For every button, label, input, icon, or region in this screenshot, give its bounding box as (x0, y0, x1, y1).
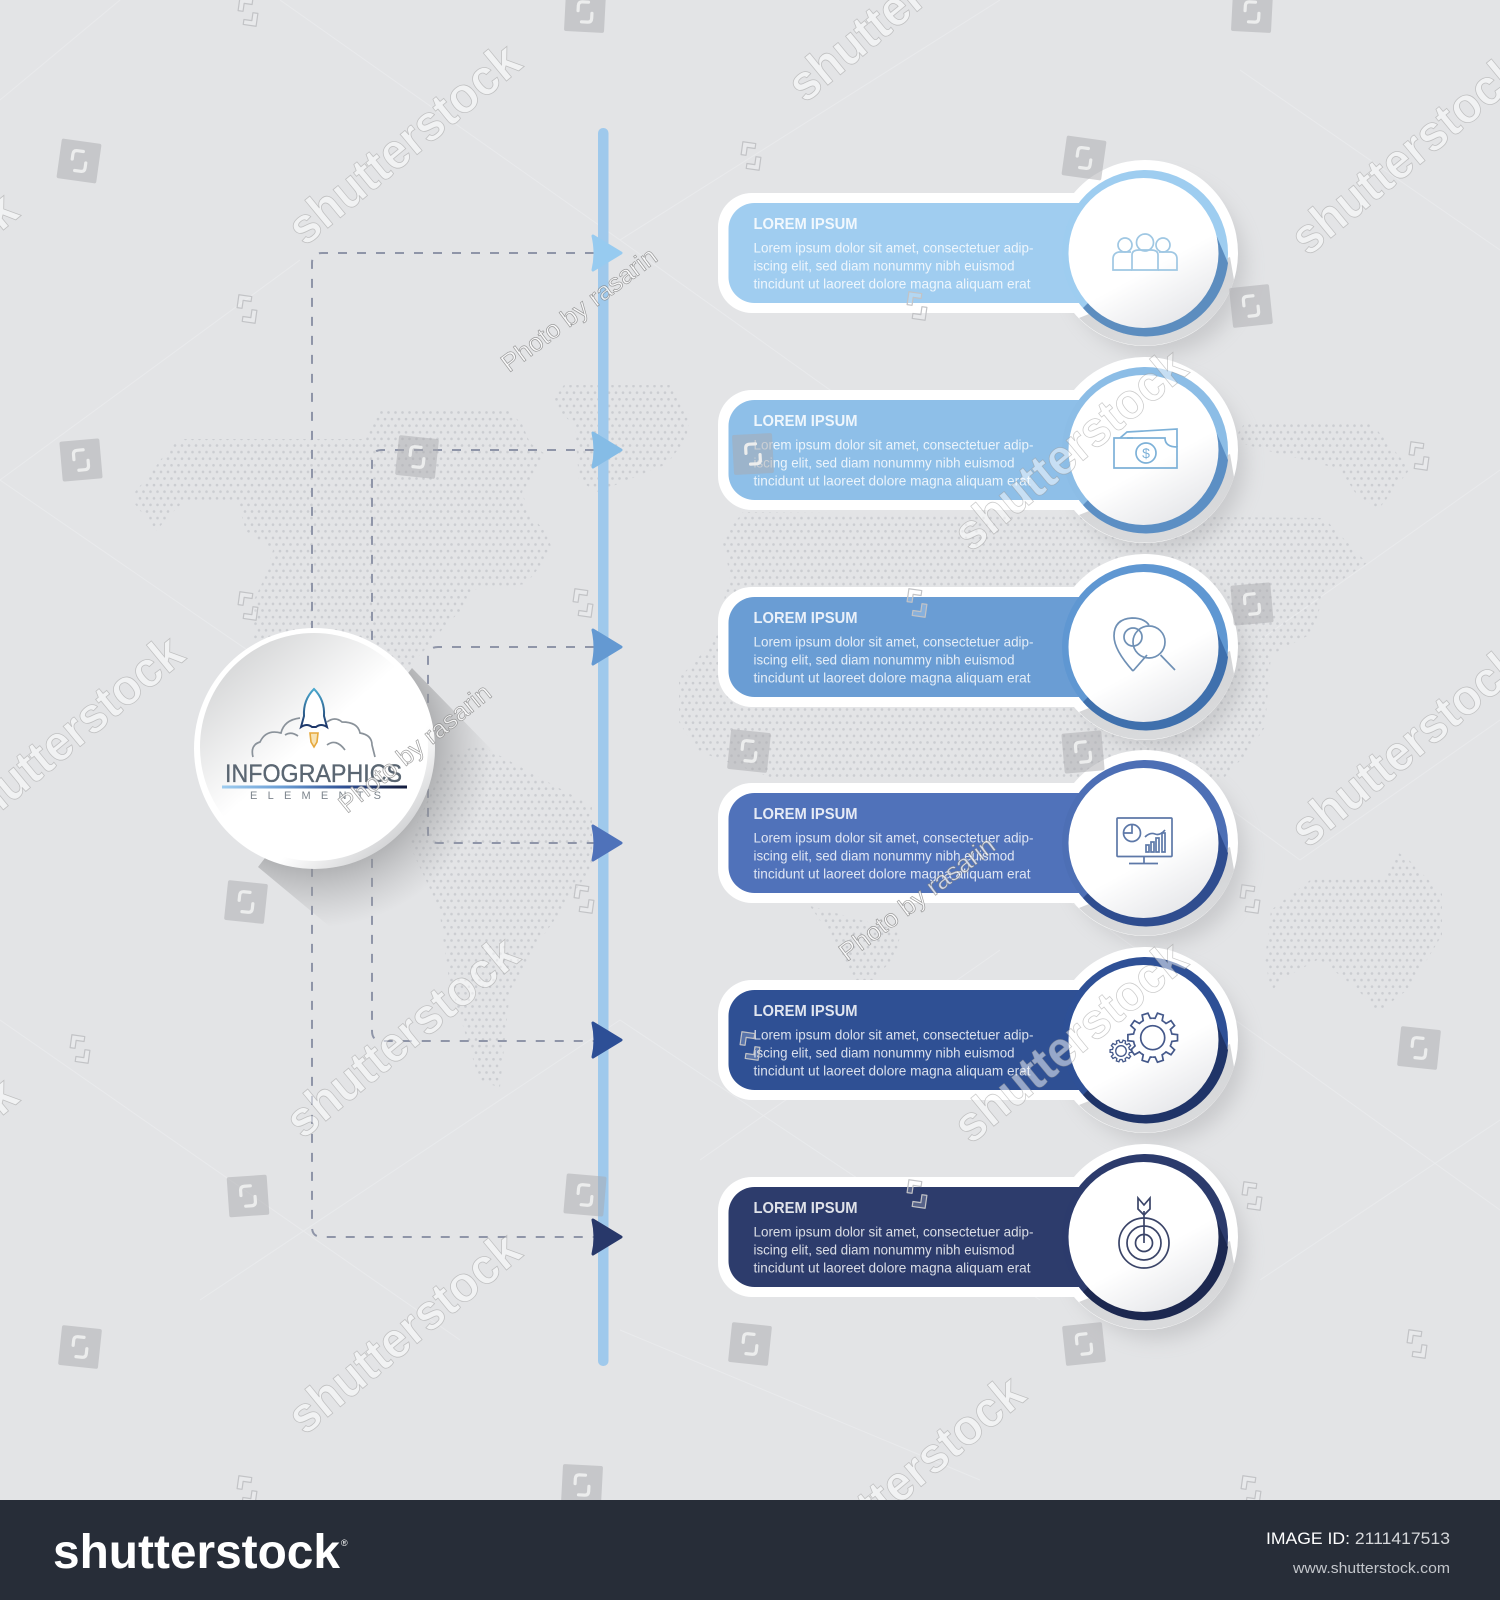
body text: iscing elit, sed diam nonummy nibh euismod (754, 1044, 1014, 1060)
watermark: photo credit: Photo by rasarin (496, 242, 663, 378)
world map: left dotted (135, 385, 690, 1087)
panel: step 5 (718, 947, 1245, 1142)
heading: LOREM IPSUM (754, 413, 858, 430)
body text: tincidunt ut laoreet dolore magna aliquam erat (754, 472, 1031, 488)
watermark: photo credit: Photo by rasarin (333, 679, 497, 819)
heading: LOREM IPSUM (754, 610, 858, 627)
panel: step 2 (718, 357, 1245, 552)
dashed connectors (312, 253, 594, 1237)
footer image id: IMAGE ID: 2111417513 (1266, 1529, 1450, 1548)
footer bar (0, 1500, 1500, 1600)
icon: gears (1110, 1012, 1178, 1063)
icon: banknotes (1114, 429, 1177, 468)
heading: LOREM IPSUM (754, 806, 858, 823)
body text: Lorem ipsum dolor sit amet, consectetuer adip- (754, 239, 1034, 255)
heading: LOREM IPSUM (754, 216, 858, 233)
body text (754, 1026, 1034, 1078)
body text: Lorem ipsum dolor sit amet, consectetuer adip- (754, 633, 1034, 649)
body text: iscing elit, sed diam nonummy nibh euismod (754, 1241, 1014, 1257)
icon: banknotes: $ (1142, 445, 1150, 461)
body text: tincidunt ut laoreet dolore magna aliquam erat (754, 865, 1031, 881)
logo title: INFOGRAPHICS (225, 760, 402, 788)
heading: LOREM IPSUM (754, 1003, 858, 1020)
body text: Lorem ipsum dolor sit amet, consectetuer adip- (754, 829, 1034, 845)
body text: Lorem ipsum dolor sit amet, consectetuer adip- (754, 1026, 1034, 1042)
icon: location pin and magnifier (1114, 618, 1175, 671)
logo subtitle: ELEMENTS (250, 790, 381, 802)
watermark: diagonal brand text: shutterstock (780, 1364, 1035, 1587)
arrow 2 (593, 433, 621, 467)
panel: step 3 (718, 554, 1245, 749)
watermark: diagonal brand text: shutterstock (942, 930, 1197, 1153)
icon: rocket and cloud logo (252, 689, 375, 757)
panel: step 1 (718, 160, 1245, 355)
world map: right dotted (679, 424, 1442, 1012)
body text (754, 829, 1034, 881)
heading: LOREM IPSUM (754, 1200, 858, 1217)
arrow 1 (593, 236, 621, 270)
body text: tincidunt ut laoreet dolore magna aliquam erat (754, 669, 1031, 685)
body text: tincidunt ut laoreet dolore magna aliquam erat (754, 1259, 1031, 1275)
footer registered mark: ® (341, 1538, 348, 1548)
logo rule (222, 786, 407, 788)
body text: tincidunt ut laoreet dolore magna aliquam erat (754, 275, 1031, 291)
watermark: photo credit: Photo by rasarin (834, 831, 1001, 967)
body text (754, 239, 1034, 291)
watermark: diagonal brand text: shutterstock (942, 338, 1197, 561)
footer website: www.shutterstock.com (1292, 1560, 1450, 1577)
arrow 3 (593, 630, 621, 664)
body text: iscing elit, sed diam nonummy nibh euismod (754, 847, 1014, 863)
body text: tincidunt ut laoreet dolore magna aliquam erat (754, 1062, 1031, 1078)
panel: step 4 (718, 750, 1245, 945)
icon: target and arrow (1119, 1198, 1169, 1268)
body text: Lorem ipsum dolor sit amet, consectetuer adip- (754, 436, 1034, 452)
central hub circle (194, 628, 565, 985)
watermark: photo credit (333, 242, 1001, 967)
footer logo: shutterstock (53, 1526, 340, 1579)
arrow 6 (593, 1220, 621, 1254)
body text (754, 436, 1034, 488)
body text: Lorem ipsum dolor sit amet, consectetuer adip- (754, 1223, 1034, 1239)
arrow 5 (593, 1023, 621, 1057)
body text: iscing elit, sed diam nonummy nibh euismod (754, 651, 1014, 667)
watermark: diagonal brand text: shutterstock (276, 1221, 531, 1444)
body text: iscing elit, sed diam nonummy nibh euismod (754, 257, 1014, 273)
timeline bar (598, 128, 608, 1366)
watermark: diagonal brand text: shutterstock (274, 925, 529, 1148)
watermark: diagonal brand text: shutterstock (276, 32, 531, 255)
arrow 4 (593, 826, 621, 860)
icon: people (1113, 234, 1177, 270)
body text (754, 633, 1034, 685)
body text: iscing elit, sed diam nonummy nibh euismod (754, 454, 1014, 470)
icon: monitor chart (1117, 818, 1172, 864)
panel: step 6 (718, 1144, 1245, 1339)
body text (754, 1223, 1034, 1275)
